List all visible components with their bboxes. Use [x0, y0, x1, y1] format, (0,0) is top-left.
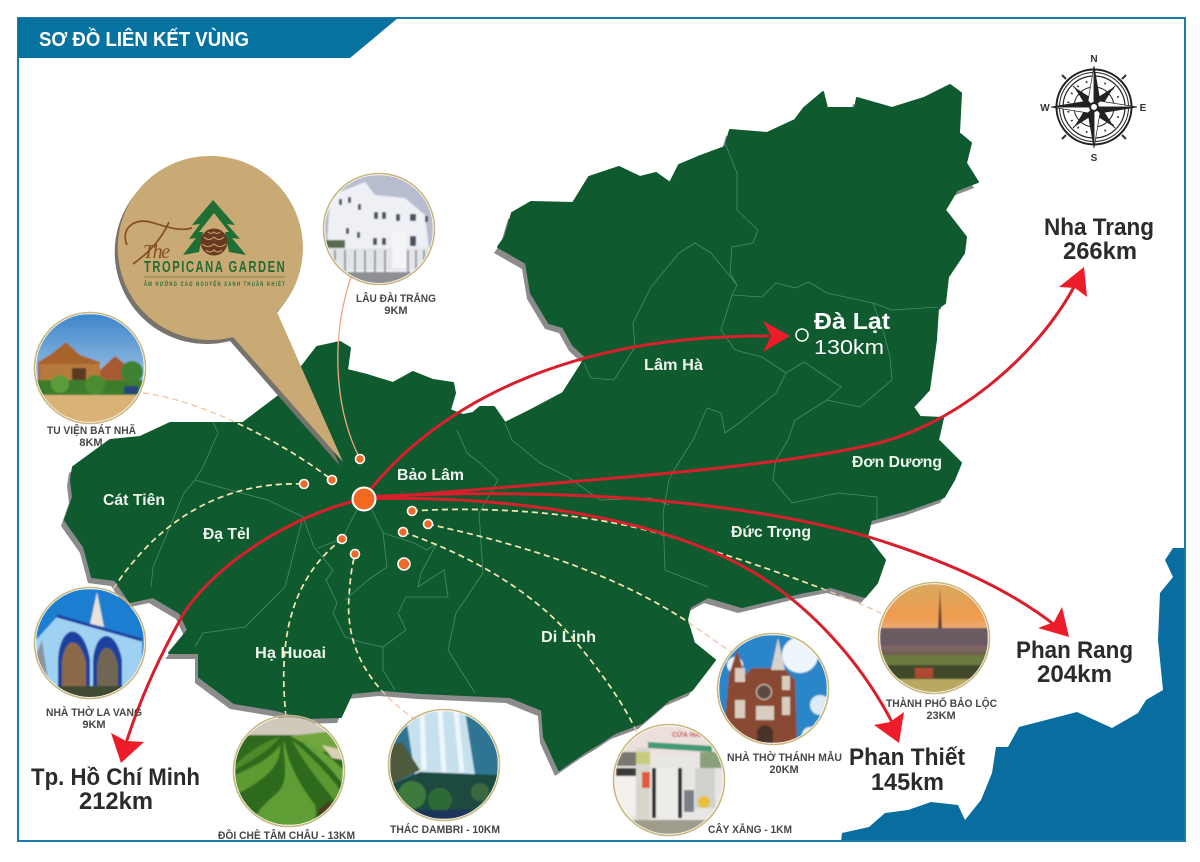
- photo: Lâu Đài Trắng: [324, 174, 436, 317]
- caption: 23KM: [926, 710, 956, 722]
- caption: TU VIỆN BÁT NHÃ: [47, 424, 136, 437]
- photo: Cây xăng: [614, 724, 792, 836]
- photo: Thác Dambri: [388, 710, 500, 836]
- caption: 20KM: [769, 764, 799, 776]
- caption: [47, 424, 136, 449]
- photo: Nhà thờ Thánh Mẫu: [718, 634, 842, 776]
- compass letters: N: [1090, 54, 1098, 65]
- caption: [46, 706, 142, 731]
- caption: NHÀ THỜ LA VANG: [46, 706, 142, 719]
- compass letters: E: [1140, 103, 1147, 114]
- arrow: Hồ Chí Minh: [111, 499, 363, 763]
- label: Phan Rang: 204km: [1037, 661, 1112, 688]
- caption: 9KM: [82, 719, 106, 731]
- Đà Lạt marker and label: [796, 308, 890, 359]
- photo: Đồi chè Tâm Châu: [218, 716, 355, 842]
- label: Tp. Hồ Chí Minh: Tp. Hồ Chí Minh: [31, 764, 200, 791]
- labels: districts: Đạ Tẻl: [203, 526, 250, 543]
- caption: [886, 696, 997, 722]
- dashed connectors: [108, 277, 881, 735]
- map of region: [61, 85, 978, 776]
- photo: Cây xăng: CỬA HÀNG XĂNG: [672, 730, 733, 739]
- label: Phan Thiết: Phan Thiết: [849, 744, 965, 771]
- location dots: [300, 454, 432, 570]
- photo: Tu Viện Bát Nhã: [34, 312, 146, 449]
- district boundaries: [151, 143, 938, 693]
- callout: project logo pin: [115, 156, 343, 466]
- logo name: TROPICANA GARDEN: [144, 257, 285, 275]
- sea: [841, 548, 1185, 842]
- caption: THÀNH PHỐ BẢO LỘC: [886, 696, 997, 710]
- caption: 8KM: [79, 437, 103, 449]
- label: Tp. Hồ Chí Minh: [31, 764, 200, 815]
- logo pine cone: [200, 228, 228, 256]
- logo script: The: [143, 241, 170, 263]
- caption: [356, 292, 436, 317]
- label: Nha Trang: Nha Trang: [1044, 214, 1154, 241]
- labels: districts: Bảo Lâm: [397, 467, 464, 484]
- compass letters: W: [1040, 103, 1050, 114]
- heading banner: [18, 18, 398, 58]
- arrow: Phan Thiết: [363, 498, 904, 743]
- caption: LÂU ĐÀI TRẮNG: [356, 292, 436, 305]
- labels: districts: Di Linh: [541, 629, 596, 646]
- label: Phan Rang: Phan Rang: [1016, 637, 1133, 664]
- route arrows: [111, 267, 1087, 763]
- logo swash: [125, 221, 192, 264]
- photo: Nhà thờ La Vang: [34, 588, 146, 731]
- Đà Lạt marker and label: Đà Lạt: [814, 308, 890, 334]
- labels: districts: Lâm Hà: [644, 357, 703, 374]
- arrow: Nha Trang: [363, 267, 1087, 499]
- logo tree: [183, 200, 246, 255]
- logo tagline: ÂM HƯỞNG CAO NGUYÊN XANH THUẦN KHIẾT: [144, 279, 285, 288]
- labels: districts: Đức Trọng: [731, 524, 811, 541]
- label: Phan Thiết: 145km: [871, 769, 944, 796]
- title: SƠ ĐỒ LIÊN KẾT VÙNG: [39, 27, 249, 51]
- compass letters: S: [1091, 153, 1098, 164]
- arrow: Đà Lạt: [363, 321, 790, 499]
- caption: 9KM: [384, 305, 408, 317]
- icon: compass: [1040, 54, 1147, 164]
- compass letters: [1040, 54, 1147, 164]
- photo: Thành phố Bảo Lộc: [878, 582, 997, 722]
- caption: THÁC DAMBRI - 10KM: [390, 823, 500, 836]
- Đà Lạt marker and label: 130km: [814, 337, 884, 359]
- caption: [727, 751, 842, 776]
- labels: districts: [103, 357, 942, 662]
- label: Nha Trang: 266km: [1063, 238, 1137, 265]
- labels: districts: Hạ Huoai: [255, 645, 326, 662]
- arrow: Phan Rang: [363, 494, 1069, 637]
- caption: ĐỒI CHÈ TÂM CHÂU - 13KM: [218, 829, 355, 842]
- label: Phan Thiết: [849, 744, 965, 796]
- labels: districts: Đơn Dương: [852, 454, 942, 471]
- label: Phan Rang: [1016, 637, 1133, 688]
- labels: districts: Cát Tiên: [103, 492, 165, 509]
- label: Nha Trang: [1044, 214, 1154, 265]
- caption: NHÀ THỜ THÁNH MẪU: [727, 751, 842, 764]
- label: Tp. Hồ Chí Minh: 212km: [79, 788, 153, 815]
- hub marker: [352, 488, 376, 510]
- caption: CÂY XĂNG - 1KM: [708, 823, 792, 836]
